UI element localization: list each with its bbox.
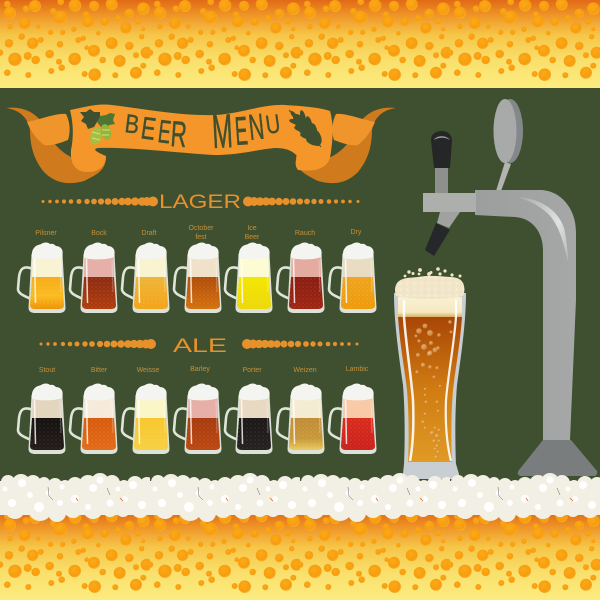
title: beer menu: M	[211, 106, 234, 159]
mug: Weizen	[277, 384, 324, 454]
title: beer menu: U	[264, 109, 282, 140]
title: beer menu: R	[169, 115, 188, 156]
lager labels: October	[189, 225, 214, 232]
dotted divider left of ale	[40, 339, 156, 349]
mug: Barley	[174, 384, 222, 454]
beer glass	[394, 267, 466, 479]
mug: Weisse	[122, 384, 170, 454]
mug: Pilsner	[18, 242, 66, 313]
right ribbon tail	[296, 108, 396, 183]
ale labels: Porter	[242, 367, 262, 374]
ale labels	[39, 366, 369, 374]
ale labels: Lambic	[346, 366, 369, 373]
glass reflections	[404, 300, 456, 461]
lager labels	[35, 225, 362, 241]
tap black knob	[431, 131, 452, 193]
heading: lager: LAGER	[159, 192, 241, 213]
lager labels: Pilsner	[35, 230, 57, 237]
icon: wheat ear	[289, 110, 325, 150]
mug: Rauch	[277, 242, 324, 313]
lager labels: fest	[195, 234, 207, 241]
title: beer menu: E	[156, 113, 173, 151]
mug: October fest	[174, 242, 222, 313]
ale labels: Stout	[39, 367, 55, 374]
beer foam overflow	[395, 267, 464, 299]
foam strip	[0, 465, 600, 535]
tap base column	[518, 440, 597, 476]
ale labels: Bitter	[91, 367, 108, 374]
ale labels: Barley	[190, 366, 210, 373]
mug: Ice Beer	[225, 242, 272, 313]
ale labels: Weisse	[137, 367, 160, 374]
rising bubbles	[414, 320, 452, 458]
ribbon main band	[70, 104, 333, 172]
left ribbon tail	[6, 108, 106, 183]
tap lever	[494, 99, 523, 191]
lager labels: Ice	[247, 225, 257, 232]
tap body and column	[475, 190, 576, 440]
mug: Stout	[18, 384, 66, 454]
glass base	[403, 464, 459, 479]
mug: Draft	[122, 242, 170, 313]
ale labels: Weizen	[293, 367, 317, 374]
tap highlight	[517, 197, 568, 262]
title: beer menu	[123, 106, 282, 159]
lager labels: Dry	[351, 229, 362, 236]
lager labels: Beer	[245, 234, 260, 241]
beer liquid	[398, 317, 462, 462]
lager labels: Rauch	[295, 230, 315, 237]
bottom beer band with bubbles	[0, 512, 600, 600]
tap cross bar	[423, 193, 476, 212]
dotted divider right of ale	[242, 339, 358, 349]
title: beer menu: B	[123, 109, 141, 140]
lager labels: Bock	[91, 230, 107, 237]
title: beer menu: E	[233, 108, 249, 154]
mug: Lambic	[329, 384, 376, 454]
mug: Bitter	[70, 384, 118, 454]
beer head	[398, 297, 462, 317]
heading: ale: ALE	[173, 336, 227, 357]
dotted divider left of lager	[42, 196, 158, 206]
icon: hop leaves and cones	[80, 109, 115, 146]
mug: Porter	[225, 384, 272, 454]
banner ribbon	[6, 104, 396, 183]
title: beer menu: N	[247, 107, 266, 148]
glass outer	[394, 293, 466, 465]
dotted divider right of lager	[243, 196, 360, 206]
top beer band with bubbles	[0, 0, 600, 88]
mug: Bock	[70, 242, 118, 313]
beer tap	[423, 99, 597, 476]
tap nozzle	[425, 212, 460, 256]
lager labels: Draft	[141, 230, 157, 237]
mug: Dry	[329, 242, 376, 313]
title: beer menu: E	[139, 110, 158, 147]
